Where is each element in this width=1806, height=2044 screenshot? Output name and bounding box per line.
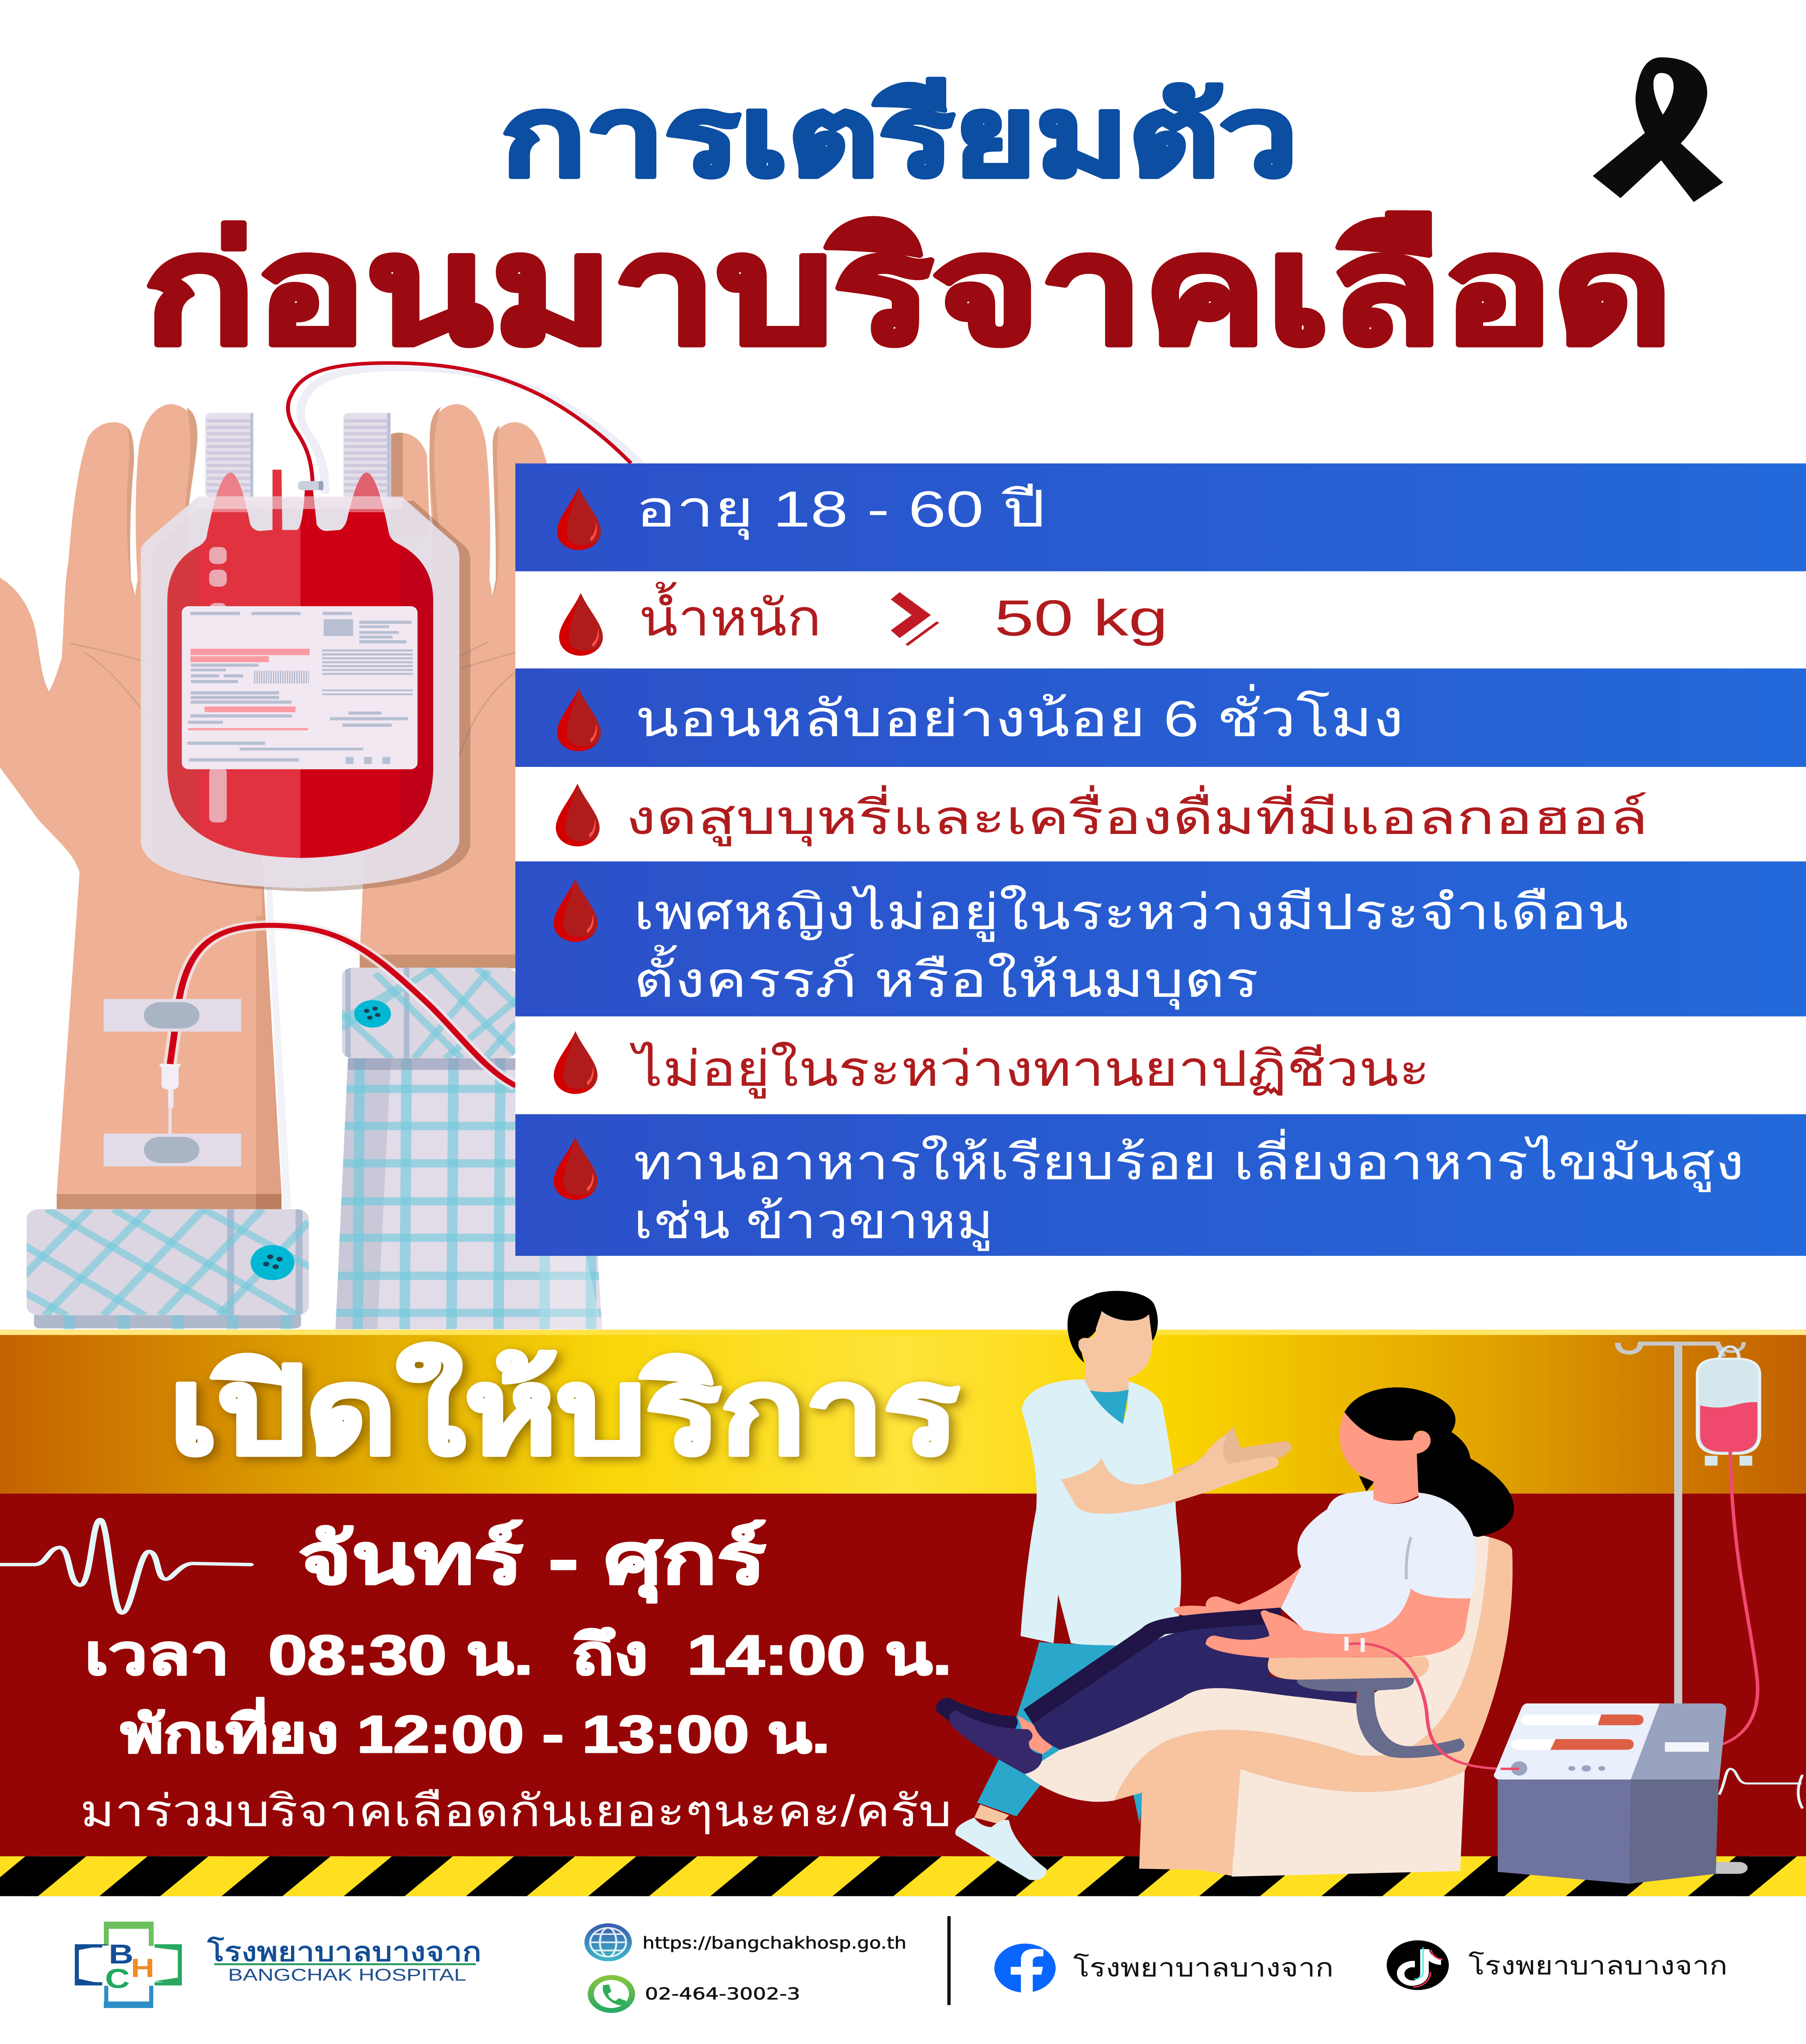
heading: open for service: เปิดให้บริการ bbox=[169, 1342, 959, 1478]
left cuff bbox=[23, 1209, 313, 1329]
text: tiktok name: โรงพยาบาลบางจาก bbox=[1468, 1951, 1728, 1980]
title: before donating blood: ก่อนมาบริจาคเลือด bbox=[144, 206, 1672, 374]
logo letter H: H bbox=[131, 1954, 154, 1983]
donor arm bbox=[1206, 1589, 1470, 1658]
icon: blood drop bbox=[556, 784, 600, 846]
medical tape bottom bbox=[103, 1134, 241, 1166]
icon: tiktok bbox=[1387, 1940, 1449, 1990]
blood bag label bbox=[182, 606, 418, 769]
right sleeve bbox=[332, 1058, 610, 1329]
text: facebook name: โรงพยาบาลบางจาก bbox=[1073, 1953, 1334, 1982]
text: age: อายุ 18 - 60 ปี bbox=[636, 481, 1045, 540]
text: lunch break: พักเที่ยง 12:00 - 13:00 น. bbox=[121, 1697, 830, 1764]
panel: requirement row 5 bbox=[515, 861, 1806, 1016]
donor face bbox=[1340, 1412, 1430, 1504]
chair body bbox=[1023, 1533, 1513, 1877]
panel: requirement row 2 bbox=[515, 572, 1806, 668]
icon: globe bbox=[584, 1923, 632, 1961]
icon: greater-than chevron bbox=[891, 592, 939, 646]
blood bag shadow bbox=[152, 501, 470, 892]
blood tube from arm to machine bbox=[1349, 1452, 1758, 1769]
doctor far hand bbox=[1174, 1427, 1291, 1474]
title: preparation: การเตรียมตัว bbox=[501, 74, 1298, 199]
doctor hair bbox=[1067, 1291, 1158, 1363]
medical tape top bbox=[103, 999, 241, 1032]
panel: requirement row 7 bbox=[515, 1114, 1806, 1256]
icon: black mourning ribbon bbox=[1593, 57, 1723, 202]
logo letter C: C bbox=[105, 1963, 130, 1994]
illustration: hands holding blood bag bbox=[0, 363, 644, 916]
doctor coat bbox=[1020, 1379, 1181, 1645]
text: pregnancy or breastfeeding: ตั้งครรภ์ หรือให้นมบุตร bbox=[633, 945, 1259, 1010]
left hand bbox=[0, 404, 262, 916]
arm tape bbox=[1345, 1637, 1365, 1652]
donor legs bbox=[1018, 1607, 1356, 1754]
text: website: https://bangchakhosp.go.th bbox=[642, 1933, 906, 1952]
right cuff button bbox=[354, 1000, 391, 1028]
left forearm bbox=[57, 854, 291, 1209]
red panel bbox=[0, 1494, 1806, 1856]
text: no antibiotics: ไม่อยู่ในระหว่างทานยาปฏิชีวนะ bbox=[630, 1041, 1430, 1099]
machine wheel bbox=[1709, 1862, 1748, 1874]
hazard stripes bbox=[0, 1856, 1806, 1896]
donor shoes bbox=[936, 1697, 1042, 1774]
gold banner bbox=[0, 1330, 1806, 1494]
panel: service hours bbox=[0, 1330, 1806, 1896]
donor hair bbox=[1345, 1387, 1514, 1537]
text: sleep: นอนหลับอย่างน้อย 6 ชั่วโมง bbox=[635, 684, 1404, 747]
text: no smoking or alcohol: งดสูบบุหรี่และเครื่องดื่มที่มีแอลกอฮอล์ bbox=[625, 785, 1648, 847]
blood bag ports bbox=[205, 413, 391, 498]
hospital name Thai: โรงพยาบาลบางจาก bbox=[207, 1936, 481, 1967]
divider bbox=[947, 1916, 951, 2005]
logo cross bbox=[75, 1922, 182, 2008]
icon: phone bbox=[588, 1975, 635, 2013]
right forearm bbox=[360, 854, 516, 968]
blood bag tube upper bbox=[288, 363, 644, 493]
donation machine bbox=[1494, 1703, 1748, 1884]
doctor far leg and trousers bbox=[974, 1642, 1143, 1824]
blood bag pouch bbox=[141, 498, 459, 888]
machine base bbox=[1498, 1780, 1719, 1884]
icon: heartbeat line bbox=[0, 1520, 251, 1613]
logo letter B: B bbox=[109, 1939, 134, 1970]
panel: requirement row 3 bbox=[515, 668, 1806, 767]
icon: blood drop bbox=[559, 593, 603, 656]
hospital name English: BANGCHAK HOSPITAL bbox=[228, 1965, 466, 1984]
needle connector bbox=[159, 1064, 181, 1134]
iv pole bbox=[1618, 1342, 1743, 1706]
doctor face bbox=[1079, 1312, 1153, 1394]
machine power cable bbox=[1719, 1769, 1803, 1809]
right cuff bbox=[340, 968, 520, 1058]
text: invitation: มาร่วมบริจาคเลือดกันเยอะๆนะคะ/ครับ bbox=[80, 1786, 952, 1836]
text: women condition: เพศหญิงไม่อยู่ในระหว่างมีประจำเดือน bbox=[633, 885, 1629, 942]
blood tube lower bbox=[170, 926, 516, 1086]
panel: requirement row 1 bbox=[515, 464, 1806, 572]
donor far hand bbox=[1174, 1567, 1301, 1616]
text: days: จันทร์ - ศุกร์ bbox=[298, 1520, 766, 1603]
machine console bbox=[1494, 1703, 1726, 1780]
icon: blood drop bbox=[557, 688, 601, 751]
illustration: needle and lower tube bbox=[103, 926, 516, 1166]
bag clip bbox=[298, 481, 323, 490]
right hand bbox=[365, 404, 613, 916]
blood fill bbox=[167, 470, 433, 858]
icon: blood drop bbox=[557, 487, 601, 550]
footer: hospital logo bbox=[75, 1922, 481, 2008]
text: weight label: น้ำหนัก bbox=[639, 582, 821, 646]
panel: requirement row 6 bbox=[515, 1016, 1806, 1114]
text: hours: เวลา 08:30 น. ถึง 14:00 น. bbox=[85, 1624, 952, 1686]
text: example food: เช่น ข้าวขาหมู bbox=[633, 1194, 994, 1251]
doctor shoe bbox=[956, 1818, 1047, 1880]
text: eat properly: ทานอาหารให้เรียบร้อย เลี่ยงอาหารไขมันสูง bbox=[633, 1129, 1744, 1192]
illustration: doctor, donor, chair and machine bbox=[936, 1291, 1803, 1884]
icon: blood drop bbox=[554, 1137, 598, 1200]
text: phone number: 02-464-3002-3 bbox=[645, 1984, 800, 2004]
chair armrest bbox=[1268, 1657, 1464, 1758]
donor shirt bbox=[1281, 1490, 1476, 1634]
iv blood bag bbox=[1697, 1347, 1760, 1466]
doctor near arm bbox=[1061, 1437, 1279, 1514]
panel: requirement row 4 bbox=[515, 767, 1806, 861]
left cuff button bbox=[251, 1245, 294, 1280]
doctor undershirt bbox=[1090, 1390, 1129, 1424]
illustration: forearms and plaid sleeves bbox=[23, 854, 610, 1329]
icon: blood drop bbox=[554, 1031, 598, 1094]
icon: blood drop bbox=[554, 879, 598, 942]
icon: facebook bbox=[994, 1943, 1056, 1992]
text: weight value: 50 kg bbox=[994, 589, 1168, 646]
